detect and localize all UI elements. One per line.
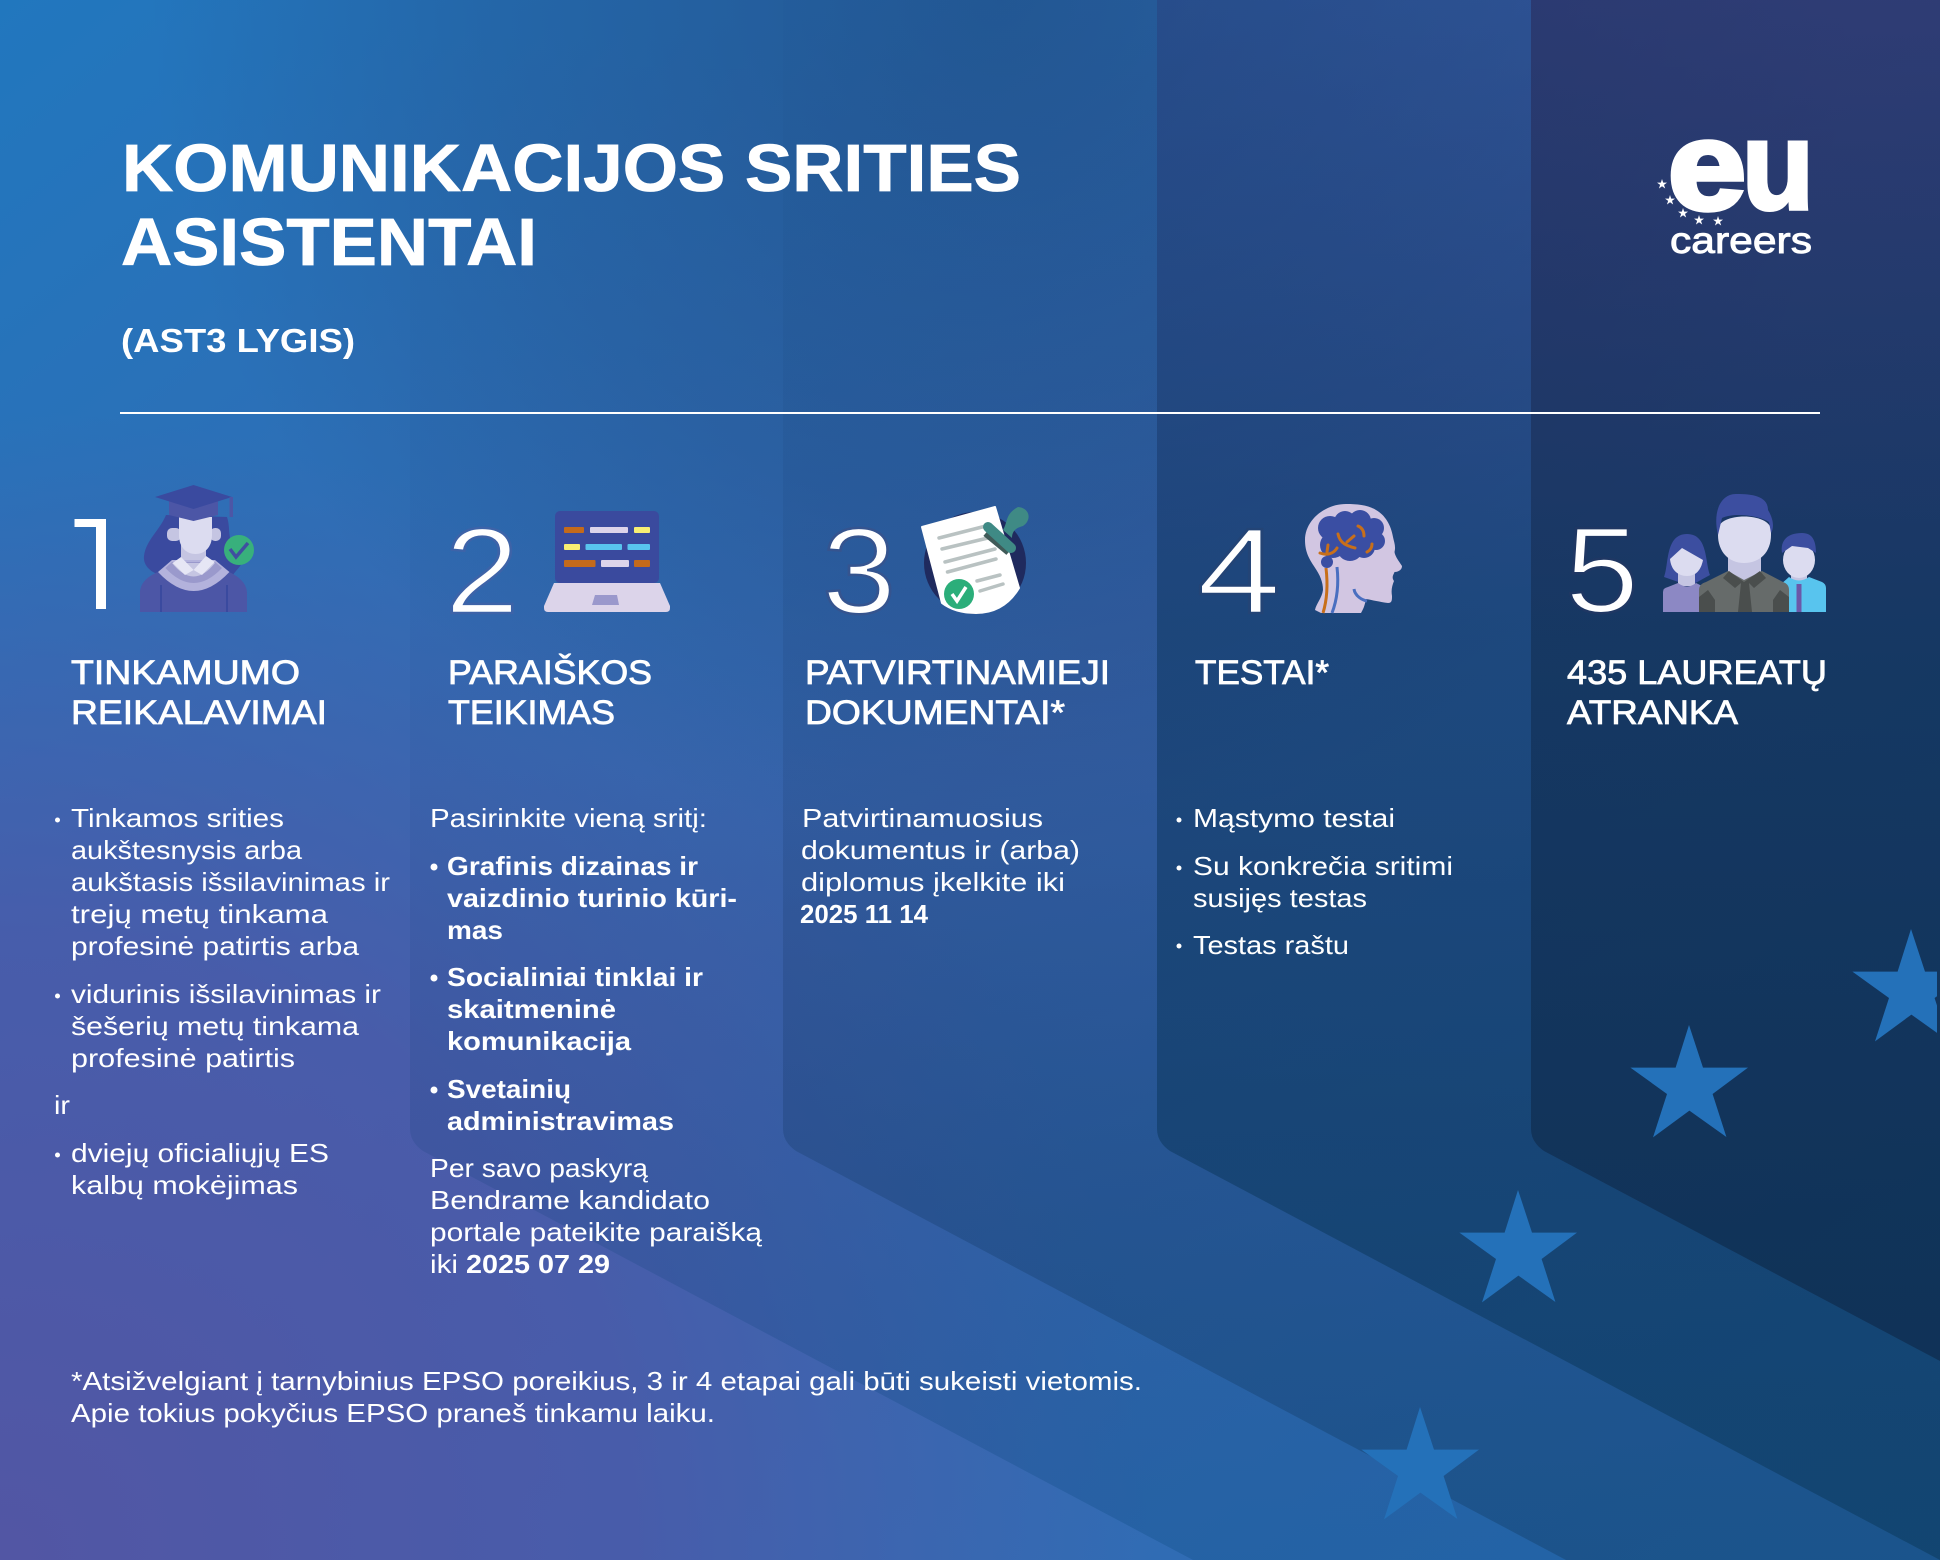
icon: graduate: [140, 485, 254, 612]
documents text: 2025 11 14: [800, 899, 929, 929]
heading 1: REIKALAVIMAI: [71, 694, 327, 732]
requirements list: profesinė patirtis: [71, 1043, 295, 1073]
requirements list: trejų metų tinkama: [71, 899, 329, 929]
step 5 column: [1565, 494, 1827, 732]
logo: EU careers: u: [1742, 97, 1814, 236]
step 3 column: [800, 503, 1110, 929]
requirements list: Tinkamos srities: [71, 803, 284, 833]
step number 1: [74, 519, 106, 609]
documents text: [800, 803, 1080, 929]
tests list: Su konkrečia sritimi: [1193, 851, 1453, 881]
step 2 column: [430, 503, 763, 1279]
application text: Grafinis dizainas ir: [447, 851, 698, 881]
application text: vaizdinio turinio kūri-: [447, 883, 737, 913]
heading 2: TEIKIMAS: [448, 694, 615, 732]
heading 4: TESTAI*: [1195, 654, 1329, 692]
requirements list: aukštasis išsilavinimas ir: [71, 867, 390, 897]
application text: Bendrame kandidato: [430, 1185, 710, 1215]
requirements list: [54, 803, 390, 1200]
heading 1: [71, 654, 327, 732]
heading 2: PARAIŠKOS: [448, 654, 652, 692]
heading 2: [448, 654, 652, 732]
application text: portale pateikite paraišką: [430, 1217, 763, 1247]
documents text: dokumentus ir (arba): [801, 835, 1080, 865]
footnote: Apie tokius pokyčius EPSO praneš tinkamu laiku.: [71, 1398, 715, 1428]
title: ASISTENTAI: [121, 205, 537, 280]
documents text: diplomus įkelkite iki: [801, 867, 1065, 897]
tests list: [1176, 803, 1453, 960]
requirements list: aukštesnysis arba: [71, 835, 303, 865]
application text: komunikacija: [447, 1026, 632, 1056]
application text: [430, 803, 763, 1279]
requirements list: dviejų oficialiųjų ES: [71, 1138, 329, 1168]
logo: EU careers: careers: [1670, 220, 1812, 261]
title: [121, 131, 1021, 280]
application text: administravimas: [447, 1106, 674, 1136]
heading 5: ATRANKA: [1567, 694, 1738, 732]
step number 5: 5: [1565, 502, 1639, 638]
icon: group of laureates: [1663, 494, 1826, 612]
footnote: [71, 1366, 1142, 1428]
decorative EU stars: [1361, 929, 1940, 1519]
title: KOMUNIKACIJOS SRITIES: [122, 131, 1021, 206]
step 1 column: [54, 485, 390, 1200]
icon: laptop: [544, 511, 670, 612]
icon: head with brain: [1305, 504, 1402, 613]
requirements list: kalbų mokėjimas: [71, 1170, 298, 1200]
logo: EU careers: [1657, 97, 1814, 261]
subtitle: (AST3 LYGIS): [121, 322, 355, 359]
requirements list: ir: [54, 1090, 70, 1120]
application text: iki: [430, 1249, 458, 1279]
tests list: Testas raštu: [1193, 930, 1349, 960]
application text: Svetainių: [447, 1074, 571, 1104]
step number 3: 3: [822, 503, 896, 639]
heading 1: TINKAMUMO: [71, 654, 300, 692]
application text: skaitmeninė: [447, 994, 616, 1024]
tests list: susijęs testas: [1193, 883, 1367, 913]
requirements list: šešerių metų tinkama: [71, 1011, 360, 1041]
step number 2: 2: [445, 503, 519, 639]
step number 4: 4: [1197, 503, 1281, 639]
application text: Pasirinkite vieną sritį:: [430, 803, 707, 833]
heading 3: [805, 654, 1110, 732]
application text: Socialiniai tinklai ir: [447, 962, 703, 992]
step 4 column: [1176, 503, 1453, 960]
heading 5: [1567, 654, 1827, 732]
application text: 2025 07 29: [466, 1249, 610, 1279]
footnote: *Atsižvelgiant į tarnybinius EPSO poreikius, 3 ir 4 etapai gali būti sukeisti vietomis.: [71, 1366, 1142, 1396]
heading 3: PATVIRTINAMIEJI: [805, 654, 1110, 692]
heading 3: DOKUMENTAI*: [805, 694, 1065, 732]
icon: stamped document: [922, 507, 1029, 614]
application text: mas: [447, 915, 503, 945]
requirements list: vidurinis išsilavinimas ir: [71, 979, 381, 1009]
logo: EU careers: e: [1668, 97, 1746, 236]
tests list: Mąstymo testai: [1193, 803, 1395, 833]
heading 5: 435 LAUREATŲ: [1567, 654, 1827, 692]
documents text: Patvirtinamuosius: [802, 803, 1043, 833]
step number 1: 1: [64, 497, 135, 640]
requirements list: profesinė patirtis arba: [71, 931, 360, 961]
application text: Per savo paskyrą: [430, 1153, 649, 1183]
